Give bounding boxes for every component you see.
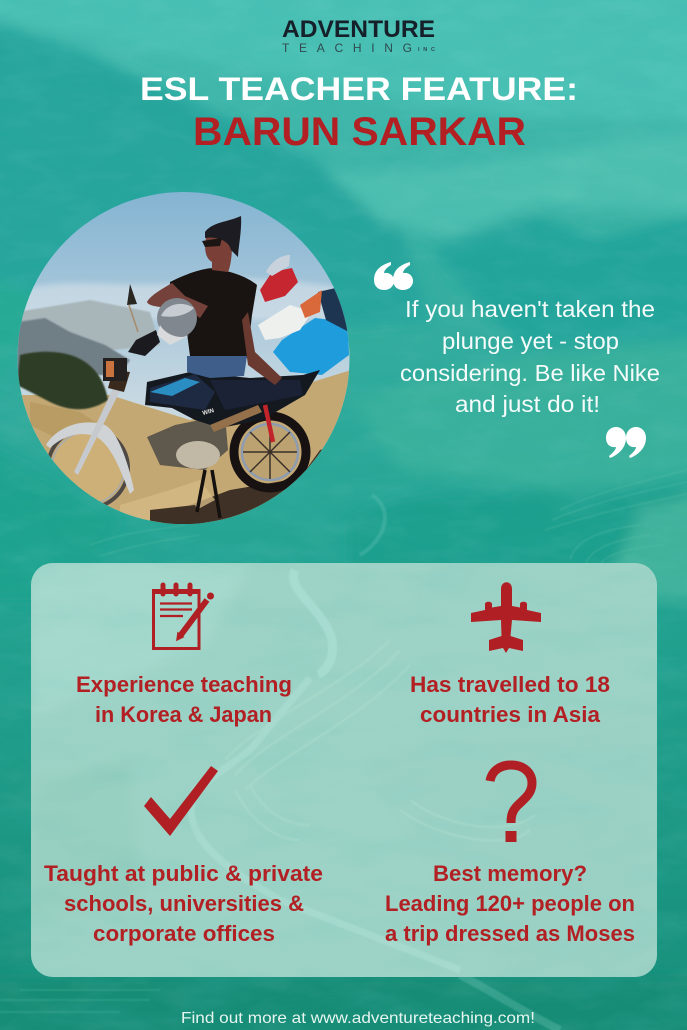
caption: in Korea & Japan <box>95 702 272 727</box>
caption: Taught at public & private <box>44 861 323 886</box>
teacher name: BARUN SARKAR <box>193 110 526 154</box>
front wheel <box>48 436 130 506</box>
quote text: and just do it! <box>455 391 600 417</box>
quote text <box>400 296 660 417</box>
caption: countries in Asia <box>420 702 601 727</box>
logo <box>282 16 435 55</box>
photo: teacher with motorcycle <box>17 192 351 530</box>
caption <box>410 672 610 727</box>
caption <box>76 672 292 727</box>
fact 3: places taught <box>44 766 323 946</box>
caption <box>385 861 635 946</box>
back luggage <box>273 318 349 375</box>
caption <box>44 861 323 946</box>
title: ESL TEACHER FEATURE: <box>140 71 578 107</box>
rear wheel <box>234 416 306 488</box>
logo: TEACHING <box>282 41 412 55</box>
helmet <box>157 298 197 338</box>
quote: opening mark <box>374 262 413 290</box>
caption: schools, universities & <box>64 891 304 916</box>
fact 1: teaching experience <box>76 585 292 727</box>
fact 2: countries travelled <box>410 582 610 727</box>
icon: check mark <box>144 766 218 836</box>
bike body <box>145 370 320 428</box>
icon: airplane <box>471 582 541 653</box>
photo: teacher with motorcycle: WIN <box>202 408 215 417</box>
man <box>170 268 257 358</box>
quote text: If you haven't taken the <box>405 296 655 322</box>
fact 4: best memory <box>385 765 635 946</box>
engine <box>147 420 228 470</box>
panel: teacher facts <box>31 563 657 977</box>
icon: question mark <box>490 765 532 842</box>
icon: notepad and pencil <box>153 585 214 648</box>
quote: closing mark <box>606 427 646 458</box>
quote text: plunge yet - stop <box>442 328 619 354</box>
footer: Find out more at www.adventureteaching.com! <box>181 1010 535 1027</box>
caption: Best memory? <box>433 861 587 886</box>
caption: Leading 120+ people on <box>385 891 635 916</box>
caption: a trip dressed as Moses <box>385 921 635 946</box>
logo: INC <box>418 47 435 53</box>
caption: Experience teaching <box>76 672 292 697</box>
caption: Has travelled to 18 <box>410 672 610 697</box>
headlight and mirror <box>103 358 127 381</box>
caption: corporate offices <box>93 921 275 946</box>
quote text: considering. Be like Nike <box>400 360 660 386</box>
logo: ADVENTURE <box>282 16 435 43</box>
